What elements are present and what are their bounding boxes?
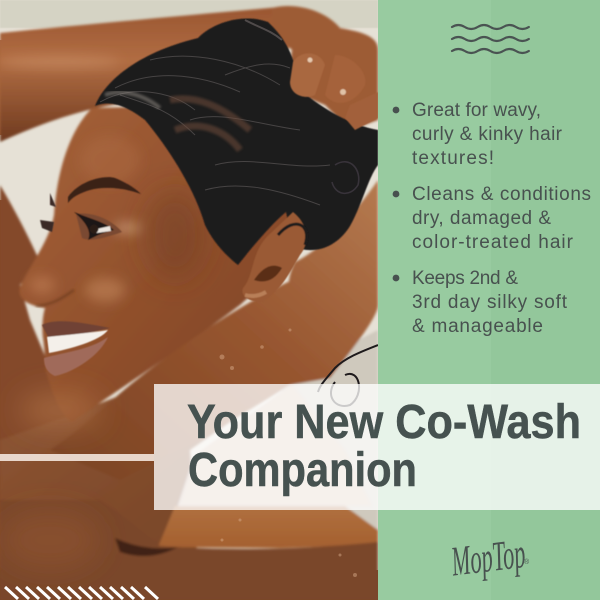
logo: MopTop: MopTop	[448, 531, 528, 586]
lower torso	[0, 500, 378, 570]
background wedge between arm and neck	[280, 330, 378, 540]
right forearm	[50, 180, 378, 480]
bullet: day-after softness	[393, 268, 568, 337]
water droplets	[220, 328, 357, 577]
bullet: hair types	[393, 100, 563, 169]
photo: woman washing her hair	[0, 0, 378, 600]
title	[187, 396, 581, 497]
bullet: hair types: curly & kinky hair	[412, 124, 563, 145]
decorative diagonal stripes	[5, 587, 158, 599]
panel: green feature column	[378, 0, 600, 600]
bullet: cleans and conditions: dry, damaged &	[412, 208, 551, 229]
bullet: hair types: Great for wavy,	[412, 100, 541, 121]
neck highlight	[158, 506, 378, 548]
bullet: hair types: textures!	[412, 148, 494, 169]
title: Companion	[188, 444, 417, 497]
logo: MopTop	[448, 531, 530, 586]
accent bar	[0, 454, 154, 461]
skin backing at photo edges	[0, 40, 378, 600]
eye and brow	[40, 177, 141, 240]
bullet list	[393, 100, 591, 337]
face	[19, 105, 300, 422]
bullet: day-after softness: Keeps 2nd &	[412, 268, 518, 289]
translucent title band	[154, 384, 600, 510]
hand on head	[272, 6, 378, 130]
icon: wavy lines	[452, 25, 529, 53]
smile	[42, 321, 110, 376]
bullet: cleans and conditions	[393, 184, 591, 253]
face highlights	[0, 56, 142, 302]
top arm	[0, 7, 320, 142]
bullet: day-after softness: 3rd day silky soft	[412, 292, 568, 313]
hair	[95, 18, 378, 265]
lower-left arm	[0, 184, 66, 440]
lower body and shoulder	[2, 396, 226, 550]
bullet: cleans and conditions: Cleans & conditions	[412, 184, 591, 205]
ear	[242, 212, 307, 302]
light gap seen through the title band	[178, 395, 296, 507]
logo: MopTop: ®	[524, 558, 530, 566]
nose shadow	[36, 290, 74, 306]
bullet: day-after softness: & manageable	[412, 316, 543, 337]
bullet: cleans and conditions: color-treated hair	[412, 232, 574, 253]
fingers on hair	[290, 53, 378, 130]
curls behind arm	[318, 345, 378, 406]
